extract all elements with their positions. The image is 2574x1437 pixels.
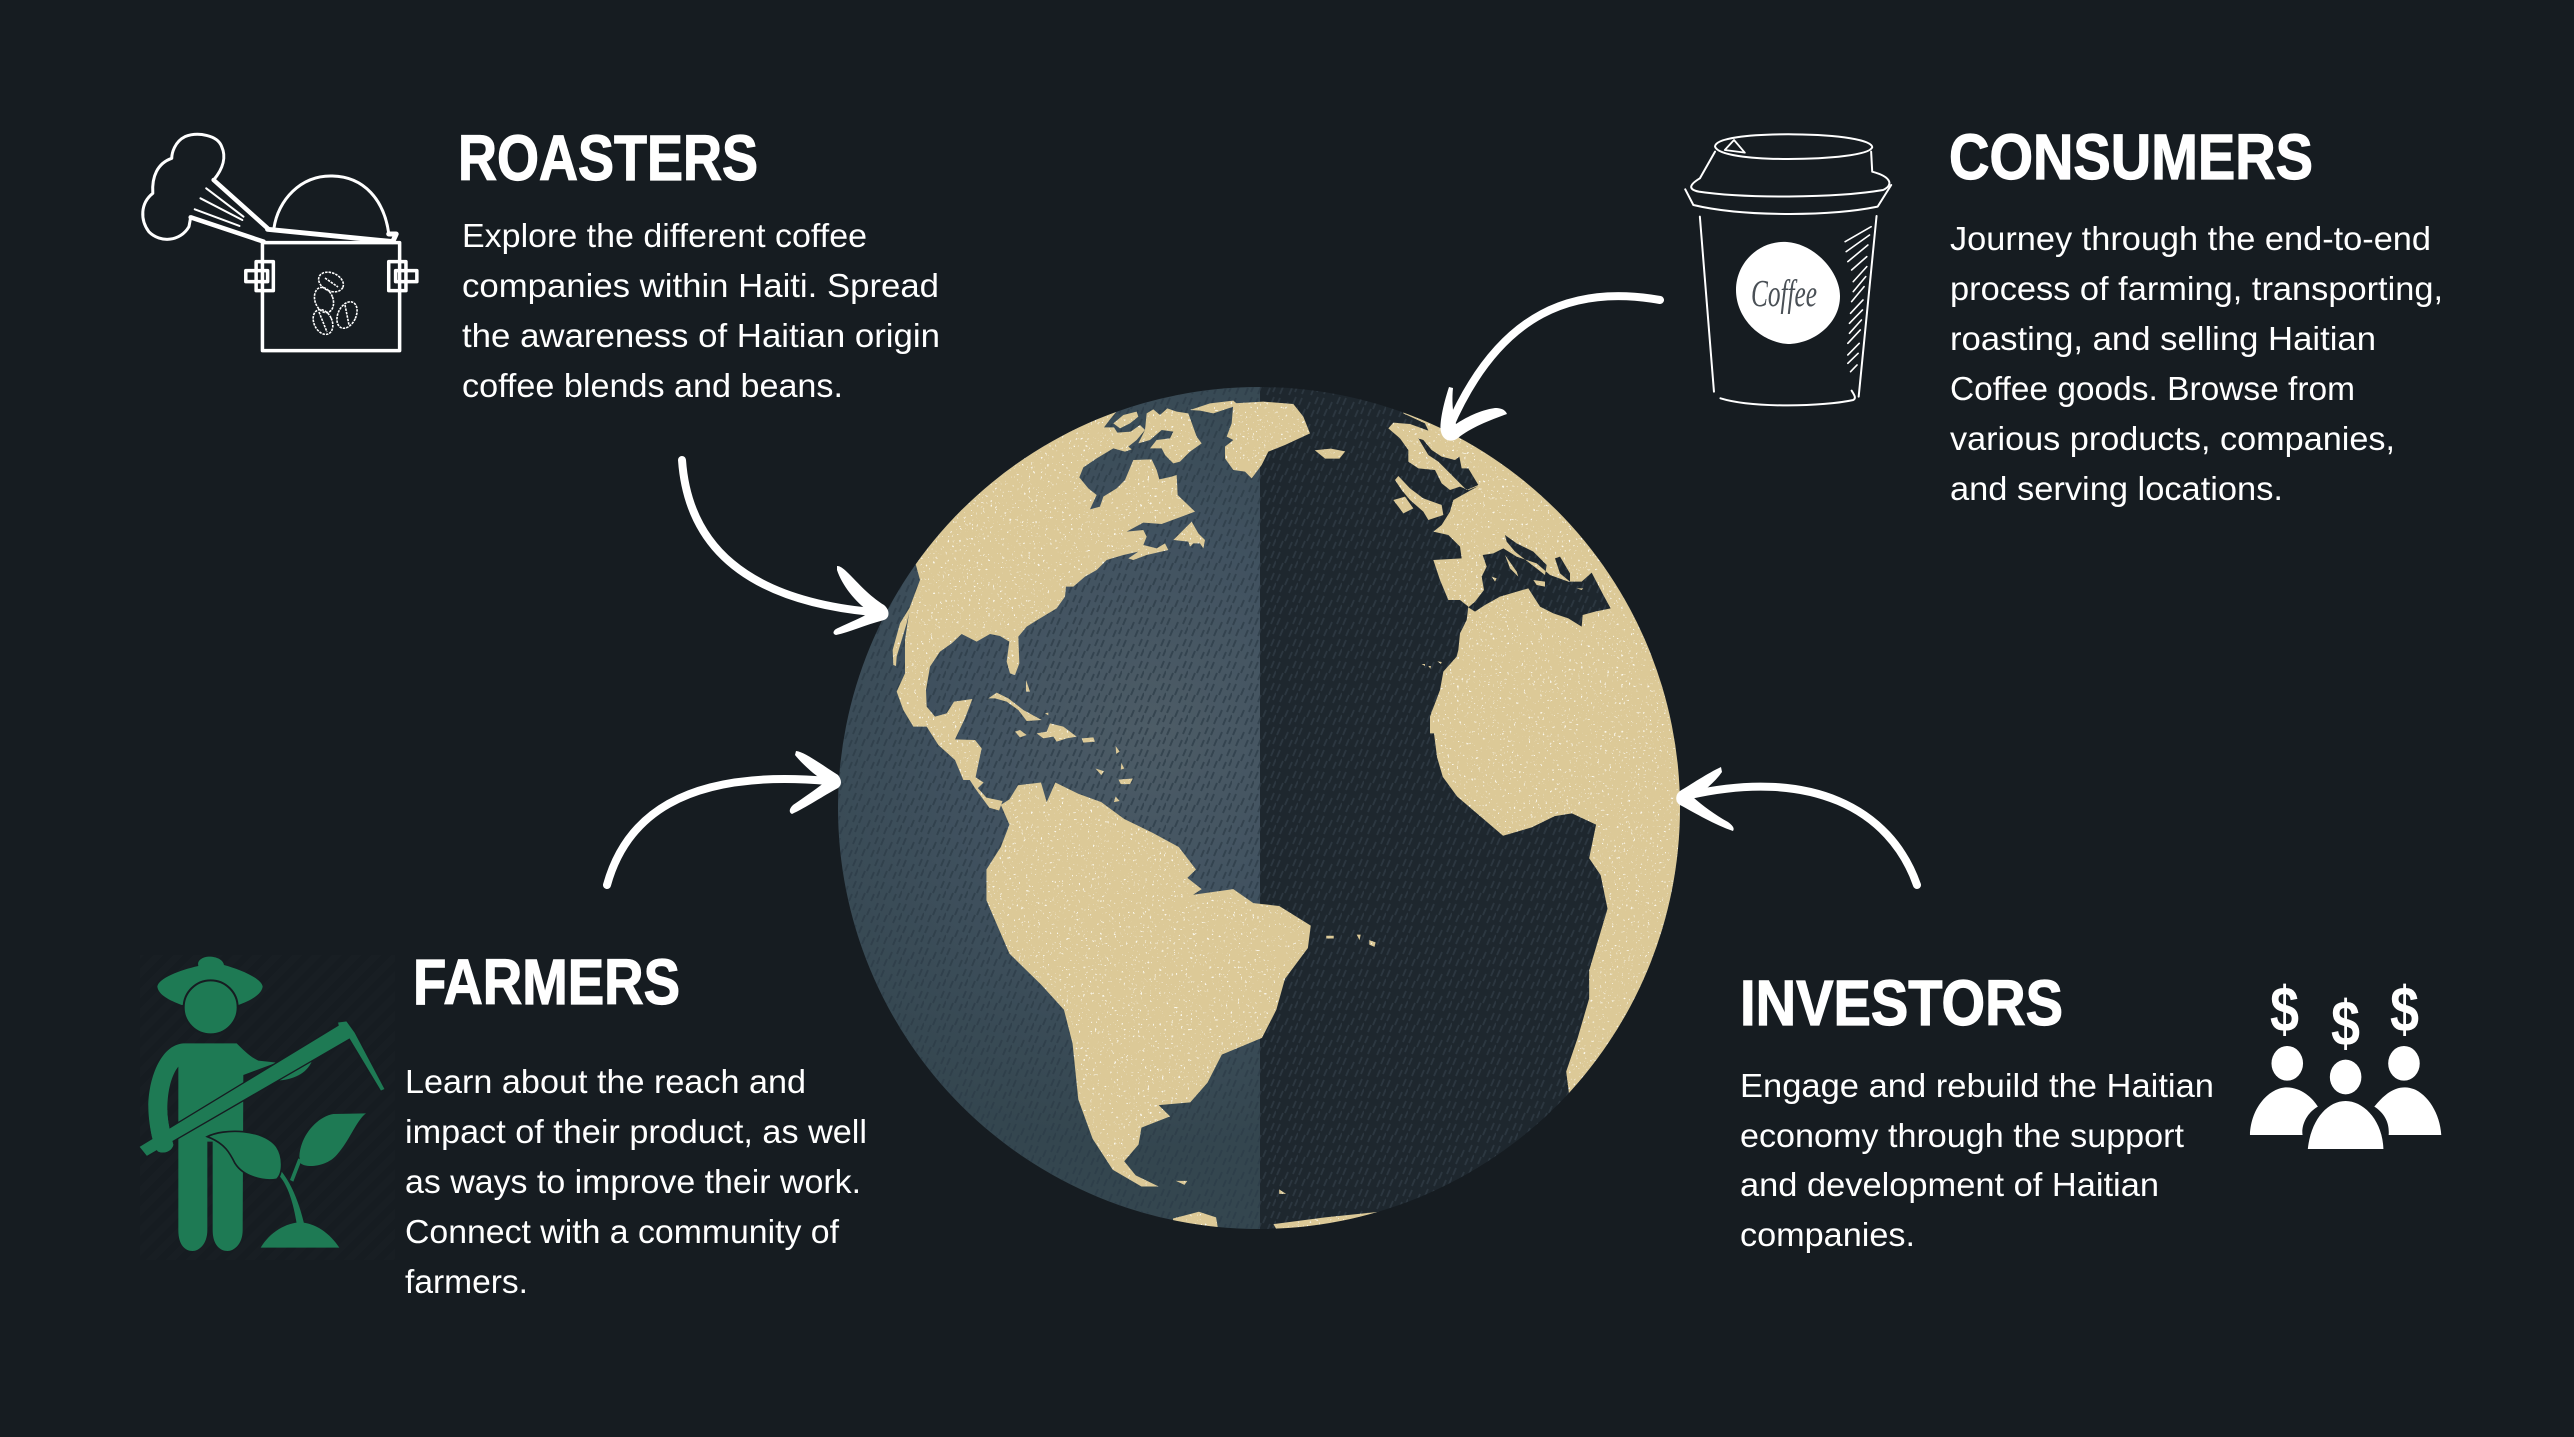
text block: farmers: as ways to improve their work. [405, 1163, 861, 1200]
heading: investors: INVESTORS [1740, 967, 2063, 1039]
hoe [139, 1021, 385, 1157]
lesser antilles [1096, 746, 1133, 802]
globe [838, 387, 1680, 1229]
icon: investors with dollar signs: $ [2270, 973, 2299, 1045]
arrow: investors to globe [1676, 767, 1917, 885]
head [184, 980, 238, 1034]
text block: roasters: Explore the different coffee [462, 217, 867, 254]
hand [277, 1062, 312, 1081]
icon: investors with dollar signs [2250, 973, 2441, 1149]
text block: consumers: Coffee goods. Browse from [1950, 370, 2355, 407]
text block: investors [1740, 1067, 2214, 1253]
left leaf [207, 1131, 282, 1180]
text block: investors: companies. [1740, 1216, 1915, 1253]
denmark and mediterranean islands [1422, 555, 1584, 668]
continents [892, 400, 1680, 1229]
icon: investors with dollar signs: $ [2331, 987, 2360, 1059]
arrow: roasters to globe [682, 460, 888, 635]
gripping arm [149, 1110, 173, 1153]
text block: investors: economy through the support [1740, 1117, 2184, 1154]
mound [261, 1222, 339, 1248]
text block: farmers: impact of their product, as well [405, 1113, 867, 1150]
text block: farmers: Connect with a community of [405, 1213, 840, 1250]
north atlantic lands [893, 401, 1310, 780]
plant stem [280, 1158, 304, 1223]
eastern hemisphere ocean [1260, 380, 1690, 1240]
baja california [893, 606, 911, 666]
text block: roasters: the awareness of Haitian origin [462, 317, 940, 354]
hat [157, 957, 263, 1005]
caribbean islands [988, 680, 1095, 743]
icon: farmer with plant [139, 955, 395, 1260]
coffee beans [309, 268, 361, 338]
text block: farmers: Learn about the reach and [405, 1063, 806, 1100]
body [148, 1043, 277, 1251]
western hemisphere ocean [830, 380, 1260, 1240]
antarctica [1173, 1212, 1380, 1234]
arrow: consumers to globe [1440, 296, 1660, 441]
central america [970, 777, 1002, 810]
text block: consumers: various products, companies, [1950, 420, 2395, 457]
text block: consumers: Journey through the end-to-end [1950, 220, 2431, 257]
heading: farmers: FARMERS [413, 946, 680, 1018]
text block: farmers [405, 1063, 867, 1300]
heading: consumers: CONSUMERS [1949, 121, 2313, 193]
text block: roasters [462, 217, 940, 404]
north america [893, 403, 1195, 780]
text block: roasters: coffee blends and beans. [462, 367, 843, 404]
text block: consumers: process of farming, transporting, [1950, 270, 2443, 307]
british isles [1393, 476, 1443, 520]
text block: roasters: companies within Haiti. Spread [462, 267, 939, 304]
text block: investors: Engage and rebuild the Haitian [1740, 1067, 2214, 1104]
text block: consumers [1950, 220, 2443, 507]
southern africa [1431, 684, 1796, 1100]
icon: coffee roaster [143, 134, 417, 351]
south america [986, 782, 1311, 1187]
icon: coffee cup [1685, 134, 1891, 405]
text block: farmers: farmers. [405, 1263, 528, 1300]
iceland [1315, 449, 1345, 459]
text block: investors: and development of Haitian [1740, 1166, 2159, 1203]
cup label [1736, 242, 1840, 344]
arctic islands [1113, 401, 1238, 463]
atlantic islands [1176, 935, 1376, 1194]
newfoundland [1173, 522, 1205, 548]
icon: coffee cup: Coffee [1751, 273, 1817, 315]
heading: roasters: ROASTERS [458, 122, 758, 194]
text block: consumers: and serving locations. [1950, 470, 2283, 507]
right leaf [299, 1113, 366, 1166]
europe and north africa [1388, 412, 1662, 734]
southern lands [970, 448, 1680, 1229]
greenland [1225, 402, 1310, 478]
icon: investors with dollar signs: $ [2390, 973, 2419, 1045]
arrow: farmers to globe [607, 751, 841, 885]
text block: consumers: roasting, and selling Haitian [1950, 320, 2376, 357]
